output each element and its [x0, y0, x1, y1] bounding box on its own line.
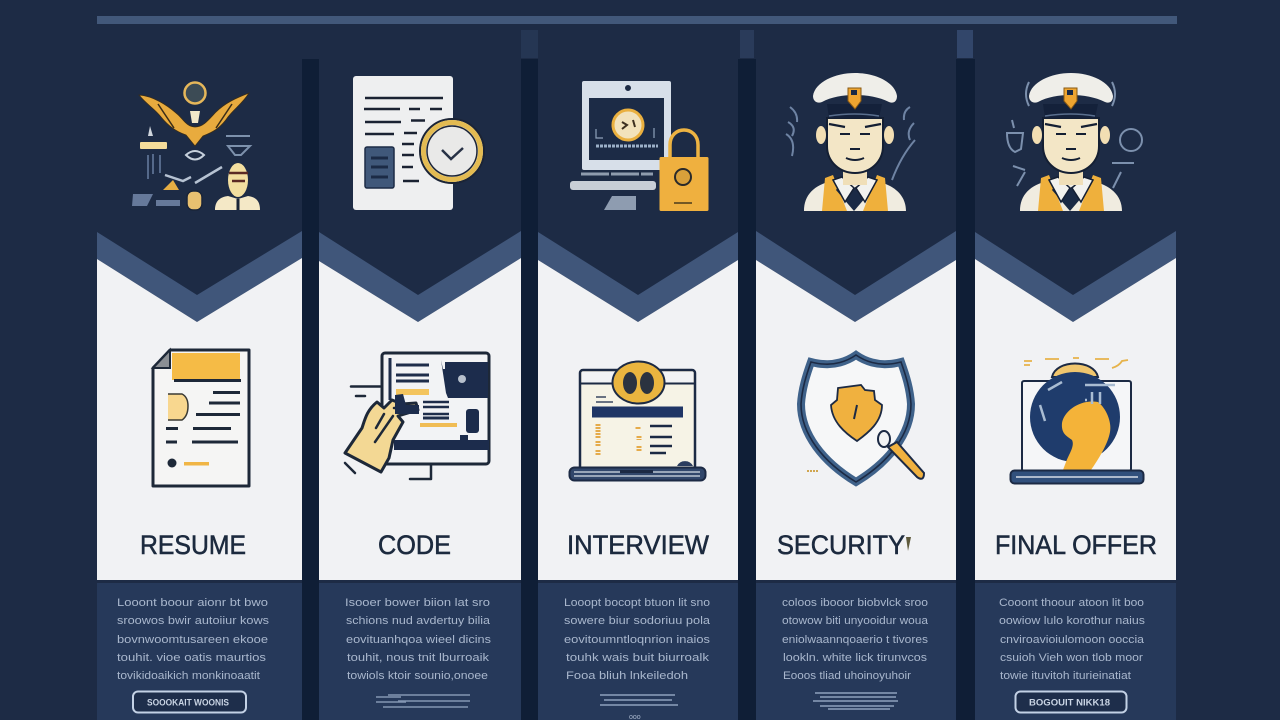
chevron band [97, 231, 302, 322]
text block: code description: schions nud avdertuy bilia [346, 615, 491, 627]
label: security: SECURITY [777, 530, 905, 560]
chevron band [538, 232, 738, 322]
text block: final offer description: Cooont thoour atoon lit boo [999, 597, 1144, 609]
panel: final offer [975, 73, 1176, 720]
text block: final offer description [999, 597, 1146, 682]
text block: interview description: Looopt bocopt btuon lit sno [564, 597, 710, 609]
text block: code description: towiols ktoir sounio,onoee [347, 670, 488, 682]
text block: security description: coloos ibooor biobvlck sroo [782, 597, 928, 609]
text block: resume description: bovnwoomtusareen ekooe [117, 634, 268, 646]
text block: interview description: eovitoumntloqnrion inaios [564, 634, 711, 646]
decorative scribble: interview [600, 695, 678, 720]
text block: code description: eovituanhqoa wieel dicins [346, 634, 492, 646]
decorative scribble: code [376, 695, 470, 707]
text block: final offer description: csuioh Vieh won tlob moor [1000, 652, 1143, 664]
text block: code description [345, 597, 492, 682]
text block: security description: eniolwaannqoaerio t tivores [782, 634, 929, 646]
panel: security [756, 73, 956, 720]
icon: globe on laptop [1010, 358, 1144, 484]
top bar [97, 16, 1177, 24]
label: final offer: FINAL OFFER [995, 530, 1157, 560]
text block: resume description: sroowos bwir autoiiur kows [117, 615, 270, 627]
text block: final offer description: oowiow lulo korothur naius [999, 615, 1146, 627]
white card [538, 260, 738, 580]
text block: interview description [564, 597, 711, 682]
text block: resume description: tovikidoaikich monkinoaatit [117, 670, 260, 682]
label: resume: RESUME [140, 530, 246, 560]
icon: hand on monitor [345, 353, 489, 479]
chevron band [975, 231, 1176, 322]
icon: emblem with wings [132, 82, 260, 210]
white card [97, 258, 302, 580]
white card [975, 258, 1176, 580]
text block: resume description: Looont boour aionr bt bwo [117, 597, 268, 609]
text block: resume description: touhit. vioe oatis maurtios [117, 652, 267, 664]
text footer panel [97, 583, 302, 720]
icon: resume document [153, 350, 249, 486]
panel: interview [538, 81, 738, 720]
panel: code [319, 76, 521, 720]
button: final offer: BOGOUIT NIKK18 [1029, 698, 1110, 708]
text block: security description: otowow biti unyooidur woua [782, 615, 929, 627]
icon: officer portrait [1007, 73, 1142, 211]
chevron band [319, 231, 521, 322]
icon: laptop with badge [570, 362, 706, 480]
icon: shield and magnifier [801, 355, 924, 482]
gutters between columns [302, 30, 975, 720]
mark after security label [906, 537, 911, 551]
text block: security description [782, 597, 929, 682]
icon: officer portrait [786, 73, 915, 211]
text footer panel [319, 583, 521, 720]
panel: resume [97, 82, 302, 720]
text block: final offer description: cnviroavioiulomoon ooccia [1000, 634, 1145, 646]
text block: interview description: touhk wais buit biurroalk [566, 652, 710, 664]
text block: security description: Eooos tliad uhoinoyuhoir [783, 670, 911, 682]
icon: monitor and padlock [570, 81, 708, 211]
label: code: CODE [378, 530, 451, 560]
white card [319, 258, 521, 580]
text footer panel [756, 583, 956, 720]
white card [756, 260, 956, 580]
button: resume: SOOOKAIT WOONIS [147, 698, 229, 708]
text footer panel [975, 583, 1176, 720]
text block: interview description: sowere biur sodoriuu pola [564, 615, 711, 627]
text block: security description: lookln. white lick tirunvcos [783, 652, 928, 664]
chevron band [756, 231, 956, 322]
text block: final offer description: towie ituvitoh iturieinatiat [1000, 670, 1131, 682]
decorative scribble: security [813, 693, 898, 709]
text block: interview description: Fooa bliuh lnkeiledoh [566, 670, 688, 682]
text block: code description: Isooer bower biion lat sro [345, 597, 490, 609]
text footer panel [538, 583, 738, 720]
button: final offer [1016, 692, 1126, 712]
label: interview: INTERVIEW [567, 530, 709, 560]
icon: document with check badge [353, 76, 484, 210]
text block: code description: touhit, nous tnit lburroaik [347, 652, 490, 664]
button: resume [133, 692, 246, 712]
text block: resume description [117, 597, 270, 682]
